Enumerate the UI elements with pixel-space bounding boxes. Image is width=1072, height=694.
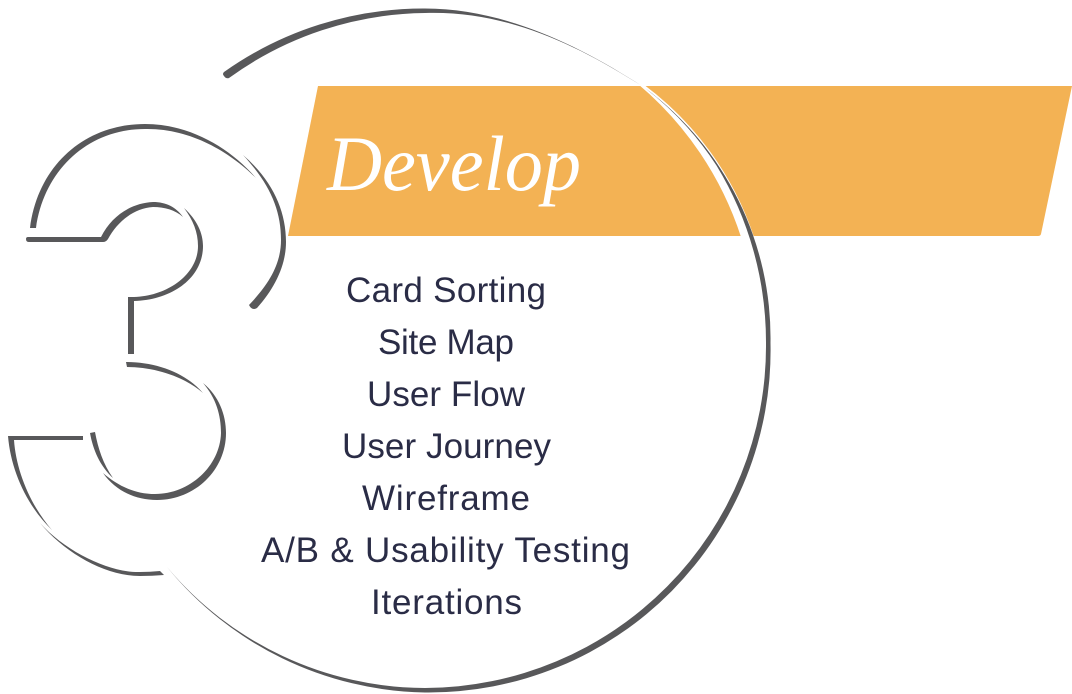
list of develop activities	[261, 271, 630, 622]
list item: Wireframe: Wireframe	[362, 479, 530, 518]
panel: orange banner	[288, 86, 1072, 236]
list item: Iterations: Iterations	[371, 583, 522, 622]
numeral stroke: lower bowl top	[126, 362, 203, 393]
list item: A/B & Usability Testing: A/B & Usability Testing	[261, 531, 630, 570]
circle arc: right and bottom segment	[167, 88, 771, 693]
numeral stroke: upper bar and inner arc	[26, 202, 183, 242]
circle arc: top segment	[223, 8, 645, 88]
heading: Develop: Develop	[326, 120, 581, 207]
numeral stroke: upper right arc	[243, 155, 286, 309]
numeral stroke: lower bar and left arc	[8, 436, 83, 530]
numeral stroke: middle bowl and stem	[128, 208, 203, 354]
numeral stroke: lower bowl left	[90, 432, 113, 478]
large circle outline	[167, 8, 771, 693]
numeral stroke: lower bowl right	[103, 383, 226, 500]
list item: User Flow: User Flow	[367, 375, 526, 414]
list item: User Journey: User Journey	[342, 427, 552, 466]
white gap cutting the banner along the circle	[638, 84, 754, 237]
numeral stroke: upper outer arc	[30, 124, 256, 228]
numeral stroke: bottom arc	[40, 523, 164, 576]
numeral 3 outline	[8, 124, 286, 576]
list item: Site Map: Site Map	[378, 323, 514, 362]
list item: Card Sorting: Card Sorting	[346, 271, 546, 310]
